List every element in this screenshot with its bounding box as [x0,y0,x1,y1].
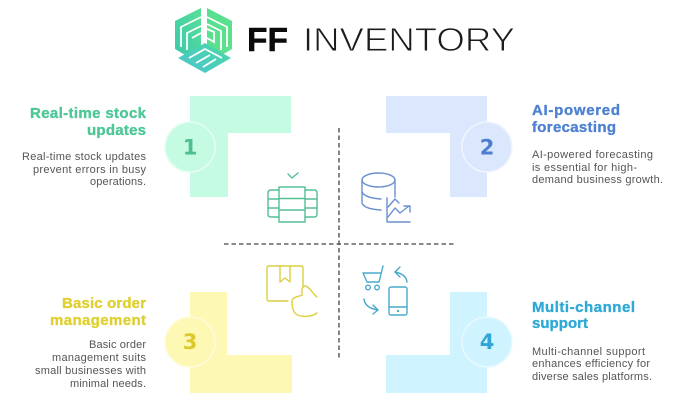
logo wordmark: FF [247,21,288,58]
description 1: operations. [90,176,146,188]
number badge 3 [165,317,215,367]
heading 3: Basic order [62,295,146,312]
number badge 3: 3 [183,330,197,354]
heading 2: AI-powered [532,102,620,119]
heading 1: Real-time stock [30,105,147,122]
description 1: Real-time stock updates [22,151,146,163]
number badge 4: 4 [480,330,494,354]
number badge 2: 2 [480,136,494,160]
number badge 1: 1 [183,136,197,160]
heading 4: support [532,315,588,332]
icon: database with growth chart [362,173,410,222]
L shape 1 [190,96,291,197]
description 4: Multi-channel support [532,346,645,358]
L shape 4 [386,292,487,393]
L shape 3 [190,292,292,393]
description 1: prevent errors in busy [33,164,146,176]
L shape 2 [386,96,487,197]
logo [175,8,515,73]
heading 3: management [50,312,146,329]
number badge 1 [165,122,215,172]
icon: cart, phone and sync arrows [363,266,407,315]
panel: real-time stock updates [22,96,291,197]
description 3: small businesses with [35,365,146,377]
description 2: AI-powered forecasting [532,149,653,161]
panel: multi-channel support [386,292,652,393]
heading 1: updates [87,122,146,139]
heading 2: forecasting [532,119,616,136]
icon: inventory shelves with check [268,173,317,222]
dashed divider: horizontal [224,243,454,245]
description 2: demand business growth. [532,174,663,186]
heading 4: Multi-channel [532,299,635,316]
number badge 2 [462,122,512,172]
icon: package in hand [267,266,317,316]
dashed divider: vertical [338,128,340,358]
panel: basic order management [35,292,292,393]
number badge 4 [462,317,512,367]
description 3: management suits [52,352,146,364]
description 3: Basic order [89,339,146,351]
logo wordmark: INVENTORY [303,21,515,58]
description 3: minimal needs. [70,378,146,390]
description 4: diverse sales platforms. [532,371,652,383]
panel: AI-powered forecasting [386,96,663,197]
icon: hexagonal logo mark [175,8,232,73]
description 2: is essential for high- [532,162,637,174]
description 4: enhances efficiency for [532,358,650,370]
